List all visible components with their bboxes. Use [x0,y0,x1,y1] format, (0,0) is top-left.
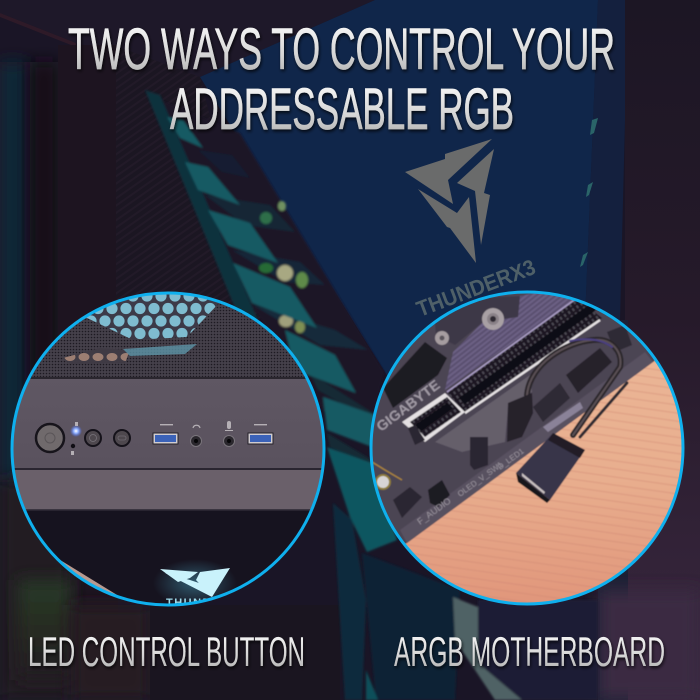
icon: blue status LED [70,425,82,437]
ring: right circle [371,292,683,604]
icon: illuminated ThunderX3 logo [160,568,230,597]
motherboard PCB [372,294,655,544]
icon: microphone jack [224,421,234,446]
capacitor [376,475,390,489]
panel: ARGB motherboard photo [372,294,682,602]
right edge teal accents [580,118,598,267]
silkscreen label [543,402,583,432]
PCIe x1 slots left [383,342,447,408]
silkscreen F_AUDIO: F_AUDIO [415,496,453,527]
long PCIe slot [447,298,602,413]
silkscreen D_LED1: D_LED1 [496,446,526,472]
jumper [470,437,488,470]
icon: LED control button [114,430,130,446]
lower case teal shapes [327,447,598,700]
silkscreen OLED_V_SW1: OLED_V_SW1 [456,460,505,499]
grey-teal light strip [453,597,522,700]
front mesh with fan light [32,294,304,377]
icon: USB port right [248,433,273,444]
icon: reset button [85,430,101,446]
brand text on panel: THUNDERX3 [413,254,539,322]
label: LED control button: LED CONTROL BUTTON [28,628,305,675]
silkscreen GIGABYTE: GIGABYTE [373,376,443,434]
gold trace [372,462,402,480]
USB header block [566,348,612,393]
3-pin header connector [507,393,533,442]
front audio header [393,487,422,518]
lower strip [15,470,321,509]
translucent retention clip [435,375,532,452]
pale table corner [60,560,117,595]
textured board [445,288,577,390]
angled vent band with teal slats [145,90,384,470]
icon: ThunderX3 logo on panel [405,139,494,263]
ARGB cable [527,339,627,437]
front I/O panel [14,377,322,468]
short PCIe slot [402,393,465,445]
icon: HDD LED [71,444,75,448]
blue case panel [200,0,600,400]
green hex vents [198,150,373,470]
ring: left circle [12,293,324,605]
ARGB connector housing [516,433,585,503]
icon: power button [36,424,64,452]
top right header [607,326,632,350]
icon: USB port left [153,433,178,444]
pin header row [533,383,570,422]
slats [167,117,380,450]
title [68,17,615,142]
USB symbols [71,422,267,455]
glow [158,562,233,602]
dark teal edge strip [145,90,258,320]
panel: LED control button photo [14,294,322,604]
small screw [435,331,449,345]
icon: headphone jack [190,425,202,446]
dark upper board [433,296,523,345]
mounting standoff [482,308,504,330]
illuminated brand text: THUNDER [166,597,230,609]
